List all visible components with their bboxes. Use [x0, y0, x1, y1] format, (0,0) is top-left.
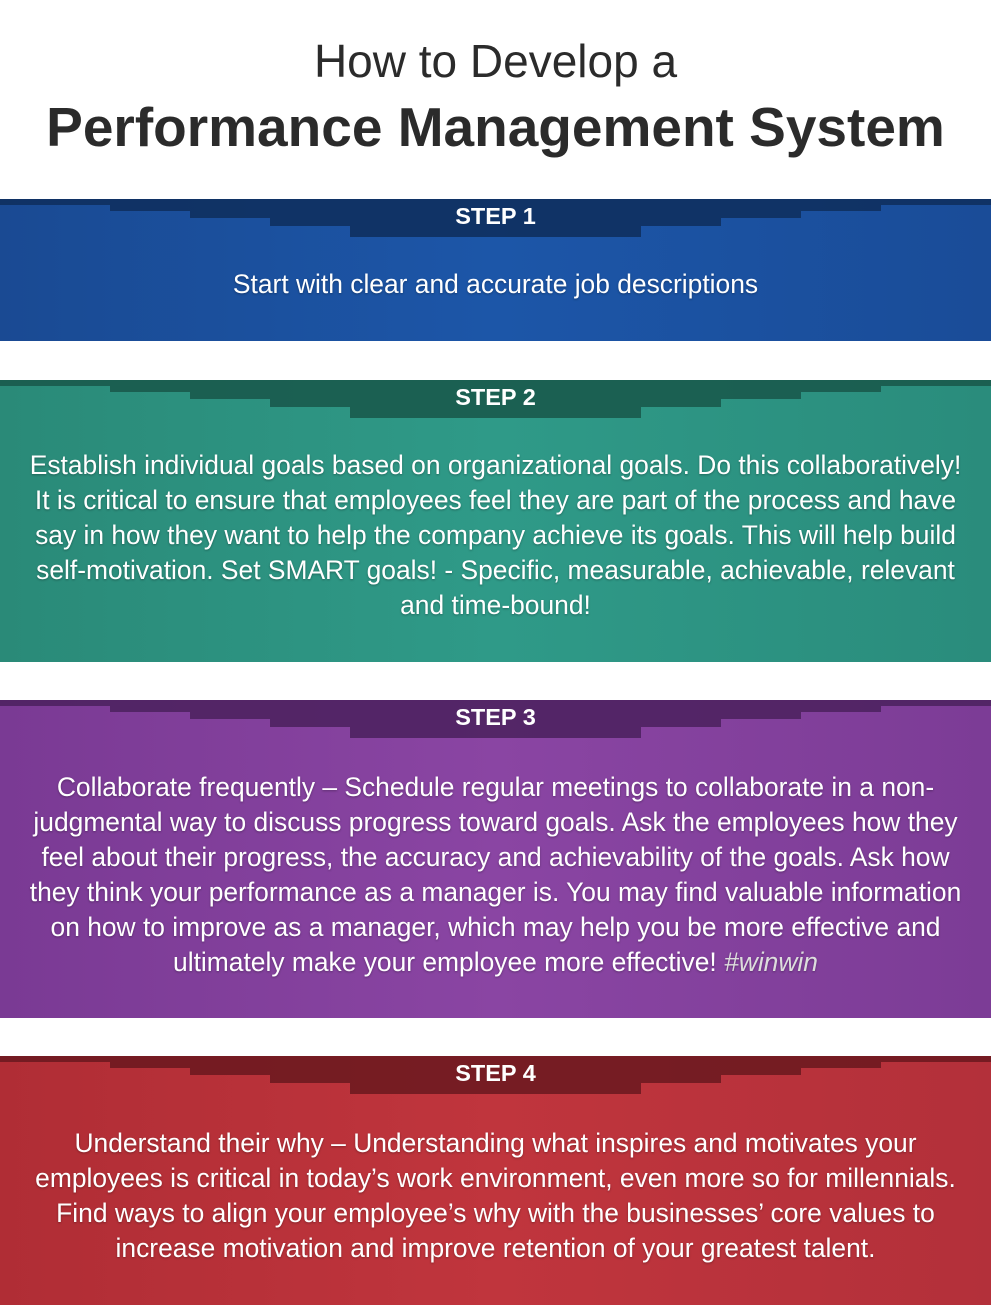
text: step 4 [35, 1128, 956, 1264]
text: step 2: Establish individual goals based on organizational goals. Do this collaboratively! [30, 450, 961, 480]
text: step 4: Find ways to align your employee’s why with the businesses’ core values to [56, 1198, 935, 1228]
text: step 3: judgmental way to discuss progress toward goals. Ask the employees how they [33, 807, 958, 837]
panel: step 1 [0, 199, 991, 341]
text: step 2 [30, 450, 961, 620]
text: step 3: on how to improve as a manager, which may help you be more effective and [51, 912, 940, 942]
text: step 2: and time-bound! [400, 590, 591, 620]
text: step 3: Collaborate frequently – Schedule regular meetings to collaborate in a non- [57, 772, 934, 802]
heading: step 3: STEP 3 [455, 704, 536, 730]
text: step 4: Understand their why – Understanding what inspires and motivates your [74, 1128, 916, 1158]
text: step 2: self-motivation. Set SMART goals! - Specific, measurable, achievable, relevant [36, 555, 955, 585]
panel: step 2 [0, 380, 991, 662]
text: step 1: Start with clear and accurate job descriptions [233, 269, 758, 299]
text: step 3 [30, 772, 961, 978]
text: step 4: employees is critical in today’s work environment, even more so for millennials. [35, 1163, 956, 1193]
heading: step 4: STEP 4 [455, 1060, 536, 1086]
text: step 2: It is critical to ensure that employees feel they are part of the process and have [35, 485, 956, 515]
title: How to Develop a [314, 35, 677, 87]
text: step 3: they think your performance as a manager is. You may find valuable information [30, 877, 961, 907]
panel: step 4 [0, 1056, 991, 1305]
text: step 4: increase motivation and improve retention of your greatest talent. [116, 1233, 875, 1263]
text: step 2: say in how they want to help the company achieve its goals. This will help build [35, 520, 956, 550]
heading: step 2: STEP 2 [455, 384, 536, 410]
text: step 3: feel about their progress, the accuracy and achievability of the goals. Ask how [41, 842, 950, 872]
panel: step 3 [0, 700, 991, 1018]
text: step 3: ultimately make your employee more effective! #winwin [173, 947, 818, 977]
heading: step 1: STEP 1 [455, 203, 536, 229]
title: Performance Management System [46, 96, 945, 158]
title [46, 35, 945, 158]
